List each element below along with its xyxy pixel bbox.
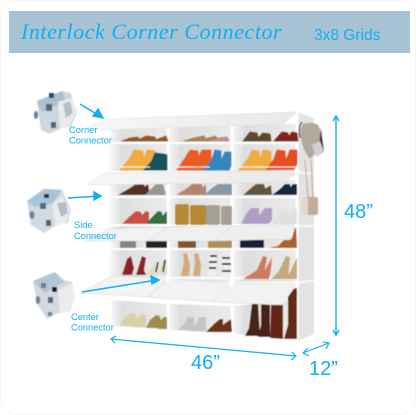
rack side panel xyxy=(297,112,314,341)
rack back panels xyxy=(110,124,297,340)
grid count: 3x8 Grids xyxy=(314,27,381,44)
top door xyxy=(87,112,297,130)
height dimension arrow xyxy=(333,116,339,335)
depth dimension arrow xyxy=(303,342,329,356)
width label: 46” xyxy=(191,352,220,374)
third row doors xyxy=(85,224,297,241)
corner connector label: Connector xyxy=(69,136,112,146)
shoes row 2 xyxy=(120,150,297,170)
center connector label: Connector xyxy=(71,322,114,332)
side connector label: Side xyxy=(74,220,93,230)
corner connector icon xyxy=(34,91,77,134)
connector joints xyxy=(166,168,300,286)
header band xyxy=(9,11,410,53)
shoe rack xyxy=(80,112,324,341)
shoes row 1 xyxy=(122,132,298,141)
height label: 48” xyxy=(344,201,373,223)
bottom row doors xyxy=(80,276,297,305)
second door xyxy=(87,170,297,185)
depth label: 12” xyxy=(309,358,338,380)
rack shelves and uprights xyxy=(110,112,297,341)
side connector label: Connector xyxy=(74,231,117,241)
side connector icon xyxy=(27,189,71,233)
side arrow xyxy=(68,192,101,200)
title: Interlock Corner Connector xyxy=(20,19,282,44)
corner arrow xyxy=(80,104,103,118)
hanging hat xyxy=(299,122,324,159)
width dimension arrow xyxy=(111,336,296,360)
shoes row 3 xyxy=(118,184,297,195)
center connector icon xyxy=(33,272,75,319)
shoes row 6: heels and sandals xyxy=(122,253,297,279)
hanging bag xyxy=(302,160,318,215)
center arrow xyxy=(82,276,159,292)
shoes row 7: low shoes and boots xyxy=(120,288,297,339)
corner connector label: Corner xyxy=(69,125,97,135)
center connector label: Center xyxy=(71,312,99,322)
shoes row 4 xyxy=(122,204,297,225)
shoes row 5 xyxy=(120,224,297,248)
